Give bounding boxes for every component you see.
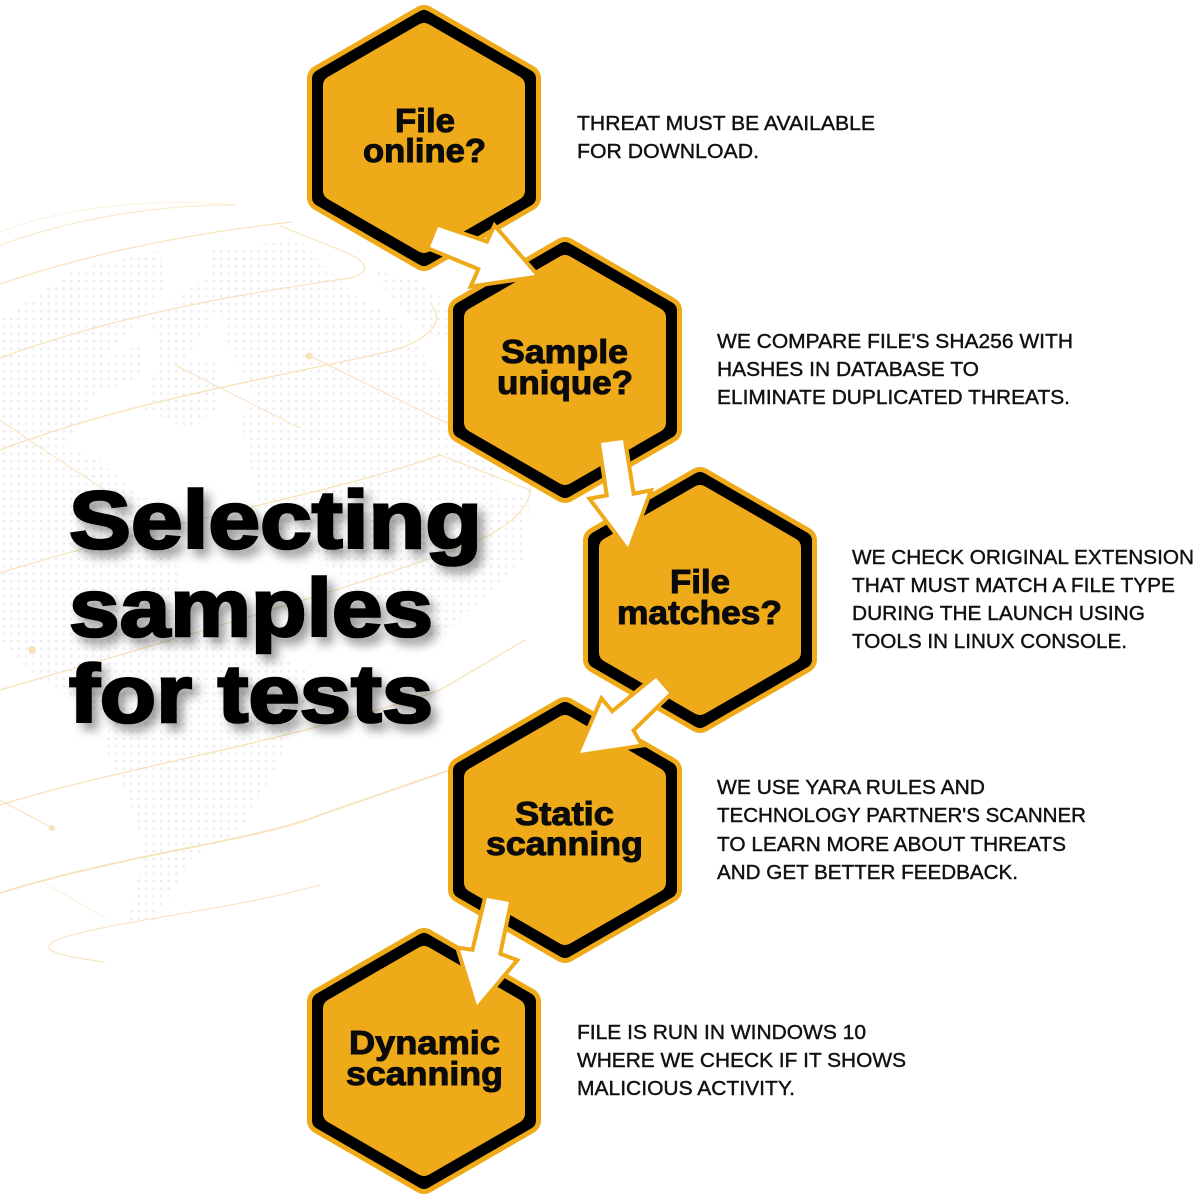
title bbox=[69, 475, 482, 740]
label: file online bbox=[363, 102, 486, 169]
background gold orbit lines bbox=[0, 202, 531, 962]
description: dynamic scanning: FILE IS RUN IN WINDOWS 10 bbox=[577, 1022, 866, 1044]
hexagon: file online bbox=[321, 19, 527, 257]
label: file matches bbox=[617, 563, 782, 631]
label: file online: online? bbox=[363, 132, 486, 169]
description: static scanning bbox=[717, 777, 1086, 884]
description: file online: FOR DOWNLOAD. bbox=[577, 141, 759, 163]
description: file matches bbox=[852, 547, 1194, 653]
hexagon: sample unique bbox=[462, 251, 668, 489]
title: samples bbox=[69, 563, 433, 654]
background globe map dots bbox=[0, 240, 530, 920]
label: sample unique bbox=[497, 333, 633, 401]
description: sample unique: ELIMINATE DUPLICATED THREATS. bbox=[717, 387, 1070, 409]
description: static scanning: AND GET BETTER FEEDBACK. bbox=[717, 862, 1018, 884]
label: dynamic scanning: scanning bbox=[346, 1055, 503, 1092]
description: file matches: THAT MUST MATCH A FILE TYPE bbox=[852, 575, 1175, 597]
description: static scanning: TO LEARN MORE ABOUT THREATS bbox=[717, 834, 1066, 856]
label: file matches: matches? bbox=[617, 594, 782, 631]
arrow: step 3 to step 4 bbox=[580, 678, 669, 753]
description: dynamic scanning: WHERE WE CHECK IF IT SHOWS bbox=[577, 1050, 906, 1072]
description: file online bbox=[577, 113, 875, 163]
hexagon: static scanning bbox=[462, 711, 668, 949]
description: sample unique: WE COMPARE FILE'S SHA256 WITH bbox=[717, 331, 1073, 353]
label: sample unique: unique? bbox=[497, 364, 633, 401]
description: file matches: TOOLS IN LINUX CONSOLE. bbox=[852, 631, 1127, 653]
description: dynamic scanning: MALICIOUS ACTIVITY. bbox=[577, 1078, 795, 1100]
label: dynamic scanning: Dynamic bbox=[349, 1024, 500, 1061]
label: sample unique: Sample bbox=[501, 333, 628, 370]
description: file online: THREAT MUST BE AVAILABLE bbox=[577, 113, 875, 135]
title: for tests bbox=[69, 649, 433, 740]
hexagon: file matches bbox=[597, 481, 803, 719]
description: file matches: WE CHECK ORIGINAL EXTENSION bbox=[852, 547, 1194, 569]
label: static scanning: scanning bbox=[486, 825, 643, 862]
label: dynamic scanning bbox=[346, 1024, 503, 1092]
arrow: step 2 to step 3 bbox=[593, 440, 648, 547]
description: static scanning: WE USE YARA RULES AND bbox=[717, 777, 985, 799]
arrow: step 4 to step 5 bbox=[460, 898, 514, 1005]
label: file online: File bbox=[395, 102, 455, 139]
hexagon: dynamic scanning bbox=[321, 942, 527, 1180]
description: sample unique: HASHES IN DATABASE TO bbox=[717, 359, 979, 381]
label: static scanning bbox=[486, 795, 643, 862]
label: static scanning: Static bbox=[515, 795, 614, 832]
description: file matches: DURING THE LAUNCH USING bbox=[852, 603, 1145, 625]
title: Selecting bbox=[69, 475, 482, 566]
arrow: step 1 to step 2 bbox=[430, 227, 535, 284]
description: dynamic scanning bbox=[577, 1022, 906, 1100]
label: file matches: File bbox=[670, 563, 730, 600]
description: sample unique bbox=[717, 331, 1073, 409]
description: static scanning: TECHNOLOGY PARTNER'S SCANNER bbox=[717, 805, 1086, 827]
